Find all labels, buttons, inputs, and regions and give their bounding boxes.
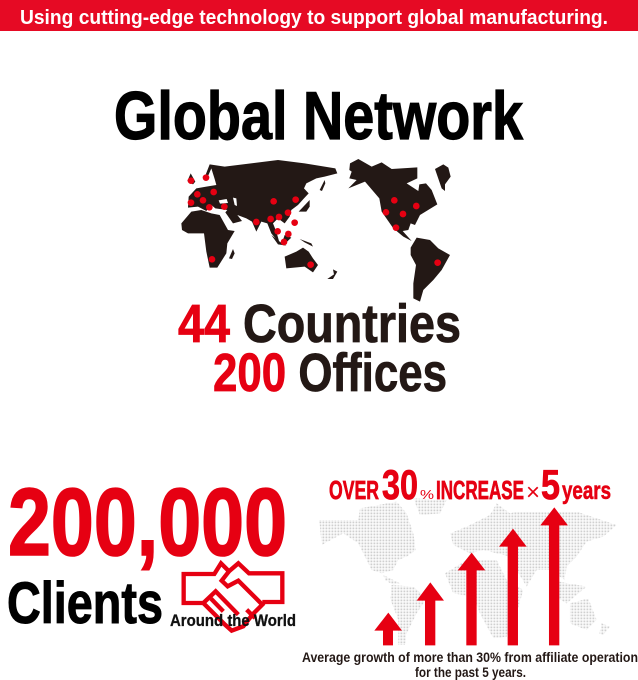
growth heading: 30 percent: 30 xyxy=(382,461,418,508)
growth caption: for the past 5 years. xyxy=(415,665,526,680)
growth heading: percent sign: % xyxy=(420,487,435,502)
arrow 3 xyxy=(458,553,485,645)
world map with office markers xyxy=(181,159,451,302)
growth arrows xyxy=(374,507,568,645)
growth heading: 5: 5 xyxy=(541,461,560,508)
growth heading: times: × xyxy=(526,479,540,506)
growth heading: years: years xyxy=(562,477,611,505)
dotted world map xyxy=(319,498,617,645)
label: around the world: Around the World xyxy=(170,611,296,630)
growth heading: increase: INCREASE xyxy=(436,475,524,505)
statistic: 200 offices: 200 Offices xyxy=(213,343,447,403)
growth heading: over: OVER xyxy=(329,475,379,505)
statistic: 44 countries: 44 Countries xyxy=(178,294,461,354)
growth caption xyxy=(302,650,638,680)
icon: handshake xyxy=(184,563,282,631)
statistic: 200,000: 200,000 xyxy=(8,469,287,576)
arrow 4 xyxy=(499,529,527,645)
arrow 5 xyxy=(540,507,568,645)
title: Global Network xyxy=(114,78,523,154)
label: clients: Clients xyxy=(7,571,163,636)
header banner: Using cutting-edge technology to support global manufacturing. xyxy=(20,6,608,29)
arrow 1 xyxy=(374,613,402,645)
arrow 2 xyxy=(417,582,444,645)
